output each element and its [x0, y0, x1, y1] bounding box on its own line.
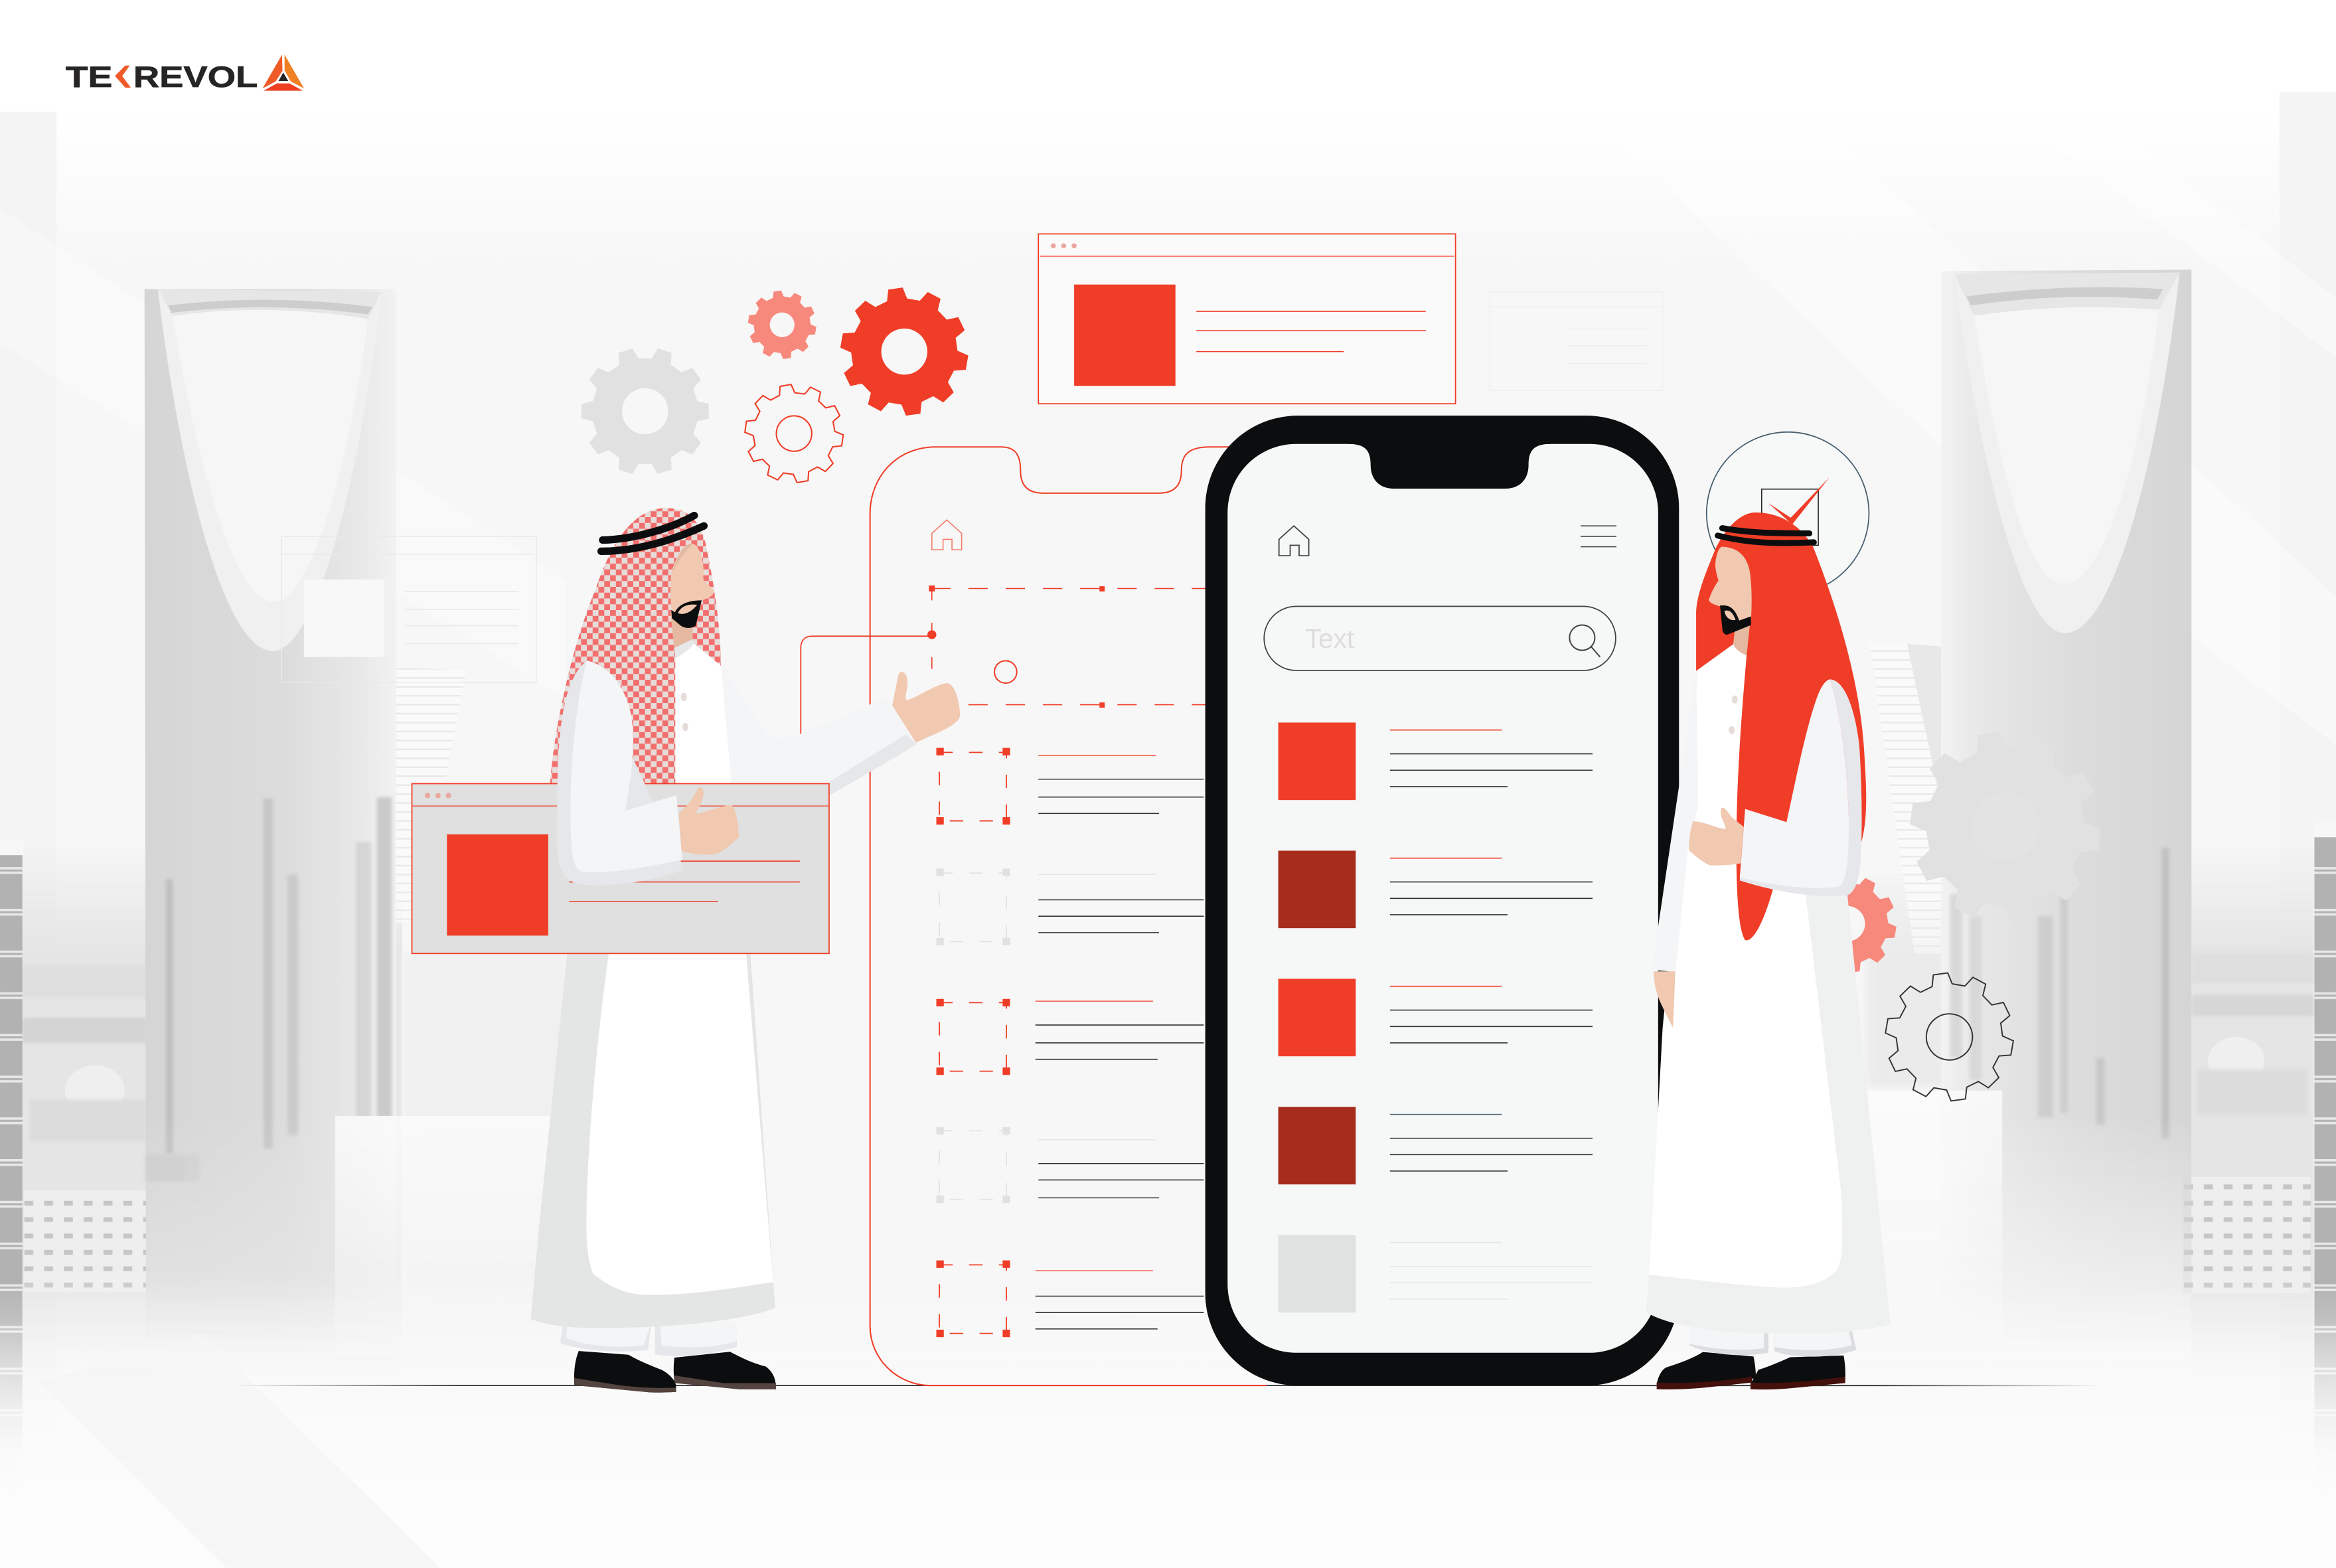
gear: dark outline — [1876, 964, 2023, 1110]
logo triangle — [262, 54, 304, 91]
keffiyeh — [550, 508, 721, 789]
faded window left — [281, 536, 536, 682]
pointing hand — [892, 672, 960, 743]
ghost row 1 — [937, 748, 1204, 824]
logo wordmark REVOL: REVOL — [133, 60, 258, 94]
bottom fade — [0, 1281, 2336, 1568]
search icon — [1569, 625, 1600, 657]
checkbox — [1762, 489, 1818, 545]
translucent block right — [1867, 1091, 2002, 1348]
halo circle — [1707, 432, 1869, 594]
neck — [670, 611, 693, 648]
gear: salmon — [743, 286, 822, 364]
side strip building right — [2313, 823, 2336, 1493]
trousers — [560, 1323, 737, 1356]
window image block — [1074, 285, 1176, 386]
sleeve front — [1652, 671, 1698, 972]
hand — [1689, 808, 1744, 866]
skyline left — [23, 842, 566, 1378]
bottom diagonal band — [40, 1334, 440, 1568]
phone notch — [1348, 432, 1551, 489]
home icon — [1279, 526, 1309, 556]
logo — [66, 54, 304, 94]
side building left — [396, 667, 466, 923]
list row 2 — [1279, 850, 1593, 928]
window dots — [1051, 243, 1077, 248]
window text lines — [1196, 311, 1426, 352]
ghost home icon — [932, 520, 962, 550]
hand on window — [678, 787, 739, 854]
Kingdom Centre tower right — [1941, 270, 2191, 1341]
gear: salmon behind man — [1791, 868, 1904, 980]
man right — [1646, 432, 1891, 1389]
red scarf — [1696, 512, 1866, 940]
face — [1709, 547, 1752, 632]
buttons — [681, 693, 688, 731]
search bar — [1264, 606, 1616, 670]
connector line — [801, 636, 929, 777]
list row 4 — [1279, 1107, 1593, 1184]
logo wordmark TE: TE — [66, 60, 112, 94]
hair shade — [672, 544, 694, 575]
neck — [1733, 618, 1751, 655]
window held — [412, 783, 829, 953]
shirt — [675, 642, 732, 785]
ground line — [231, 1385, 2102, 1386]
shoes — [1657, 1352, 1845, 1389]
skyline right — [1867, 842, 2313, 1378]
check mark — [1768, 477, 1830, 524]
robe lower — [530, 939, 775, 1328]
logo chevron — [115, 66, 131, 88]
list row 3 — [1279, 979, 1593, 1056]
ghost row 5 — [937, 1261, 1204, 1337]
menu icon — [1581, 526, 1616, 547]
side building right — [1870, 644, 1941, 953]
held window block — [447, 834, 548, 935]
ghost phone outline — [870, 447, 1267, 1385]
selection circle — [994, 661, 1017, 683]
ghost selection box — [927, 586, 1207, 708]
arm shadow — [830, 734, 917, 795]
side strip building left — [0, 840, 24, 1496]
left sleeve — [557, 661, 682, 885]
top window — [1038, 234, 1456, 404]
collar — [674, 639, 694, 659]
Kingdom Centre tower left — [145, 289, 396, 1356]
beard — [1720, 605, 1751, 635]
trousers — [1689, 1323, 1856, 1357]
translucent block left — [335, 1116, 581, 1356]
shoes — [574, 1351, 776, 1393]
white robe — [1649, 644, 1842, 1288]
gear: red — [830, 279, 978, 424]
held window lines — [569, 861, 800, 902]
sleeve shade — [1740, 679, 1862, 896]
phone — [1206, 416, 1679, 1385]
search placeholder: Text — [1305, 623, 1354, 654]
back robe — [1646, 894, 1891, 1334]
ghost row 4 — [937, 1127, 1204, 1203]
big faded gear — [1899, 721, 2112, 933]
list row 5 — [1279, 1235, 1593, 1312]
faded window right — [1490, 292, 1663, 390]
headband — [1718, 528, 1814, 543]
list row 1 — [1279, 722, 1593, 800]
headband — [601, 516, 704, 551]
gear: red outline — [739, 379, 849, 488]
buttons — [1729, 696, 1738, 734]
man left — [412, 508, 960, 1393]
pointing arm — [722, 666, 916, 834]
face — [670, 544, 714, 626]
ghost row 2 — [937, 868, 1204, 945]
forearm hand lower — [1654, 971, 1675, 1028]
gear: gray — [582, 349, 709, 474]
sleeve — [1740, 679, 1849, 888]
held window dots — [425, 793, 451, 798]
ghost row 3 — [937, 999, 1204, 1075]
beard — [671, 600, 702, 628]
